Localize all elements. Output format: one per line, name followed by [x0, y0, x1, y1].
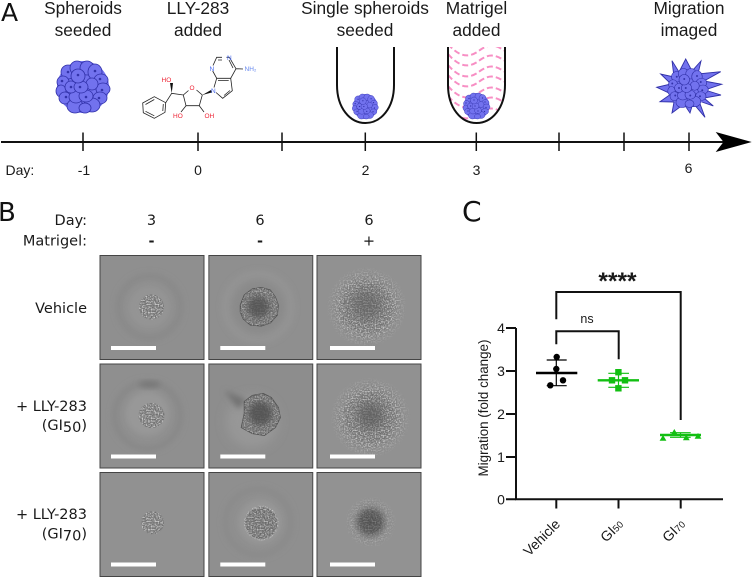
y-axis title: Migration (fold change)	[476, 340, 491, 476]
micrograph: GI50 day 6 matrigel	[316, 364, 422, 468]
micrograph: GI50 day 6	[208, 364, 314, 468]
micrograph: vehicle day 6 matrigel	[316, 255, 422, 360]
timeline day labels	[6, 160, 693, 178]
column headers: +	[363, 234, 375, 250]
timeline day labels: -1	[78, 162, 90, 178]
column headers	[23, 213, 375, 250]
timeline day labels: 3	[473, 162, 481, 178]
row labels: Vehicle	[35, 301, 87, 317]
column headers: Matrigel:	[23, 234, 87, 250]
significance bracket: vehicle vs GI70: ****	[598, 268, 637, 295]
data: vehicle	[536, 354, 577, 388]
row labels: (GI	[42, 418, 63, 434]
panel A: experimental timeline	[1, 0, 752, 178]
significance bracket: vehicle vs GI50	[556, 312, 619, 359]
timeline arrow	[1, 132, 752, 152]
y-axis tick labels: 3	[497, 363, 505, 379]
column headers: Day:	[55, 213, 87, 229]
significance bracket: vehicle vs GI70	[556, 268, 681, 420]
icon: LLY-283 molecule: HO	[162, 77, 171, 84]
timeline day labels: 6	[685, 160, 693, 176]
row labels: 50	[63, 420, 81, 436]
row labels: )	[81, 526, 87, 542]
significance bracket: vehicle vs GI50: ns	[580, 312, 594, 326]
column headers: 3	[147, 213, 156, 229]
y-axis tick labels: 0	[497, 492, 505, 508]
icon: LLY-283 molecule: N	[210, 66, 214, 73]
icon: LLY-283 molecule: N	[211, 88, 216, 95]
icon: migrating spheroid	[657, 59, 722, 117]
icon: LLY-283 molecule: O	[190, 85, 195, 92]
x-axis labels: GI50	[597, 516, 626, 545]
icon: well with matrigel and spheroid	[448, 44, 505, 123]
micrograph: vehicle day 6	[208, 255, 314, 360]
micrograph: GI70 day 3	[100, 472, 204, 577]
micrograph: GI70 day 6 matrigel	[316, 472, 422, 577]
timeline day labels: 2	[362, 162, 370, 178]
micrograph: GI50 day 3	[100, 364, 204, 468]
panel B: spheroid micrographs	[0, 198, 422, 577]
column headers: 6	[255, 213, 265, 229]
icon: LLY-283 molecule: N	[227, 55, 232, 62]
row labels: (GI	[42, 526, 63, 542]
step label: migration imaged: imaged	[661, 20, 717, 40]
y-axis tick labels: 4	[497, 320, 505, 336]
panel C: migration chart	[462, 195, 723, 559]
y-axis tick labels: 2	[497, 406, 505, 422]
icon: LLY-283 molecule	[143, 55, 257, 120]
icon: well with single spheroid	[337, 47, 394, 123]
column headers: 6	[364, 213, 374, 229]
row labels	[16, 301, 87, 544]
micrograph: vehicle day 3	[100, 255, 204, 360]
step label: LLY-283 added: added	[174, 20, 222, 40]
chart axes	[506, 328, 723, 508]
data: GI70	[660, 429, 701, 441]
y-axis tick labels: 1	[497, 449, 505, 465]
step label: spheroids seeded: seeded	[55, 20, 111, 40]
x-axis labels: GI70	[659, 516, 688, 545]
row labels: )	[81, 418, 87, 434]
timeline day labels: 0	[194, 162, 202, 178]
data: GI50	[598, 369, 639, 392]
step label: matrigel added: added	[452, 20, 501, 40]
column headers: -	[257, 234, 263, 250]
y-axis tick labels	[497, 320, 505, 508]
timeline day labels: Day:	[6, 162, 34, 178]
icon: LLY-283 molecule: HO	[173, 113, 183, 120]
row labels: 70	[63, 528, 81, 544]
panel letter C: C	[462, 195, 482, 228]
micrograph: GI70 day 6	[208, 472, 314, 577]
x-axis labels	[520, 516, 688, 559]
icon: LLY-283 molecule: NH₂	[244, 66, 257, 73]
row labels: + LLY-283	[16, 507, 87, 523]
icon: LLY-283 molecule: OH	[204, 113, 215, 120]
x-axis labels: Vehicle	[520, 516, 563, 559]
row labels: + LLY-283	[16, 399, 87, 415]
step label: single spheroids seeded: seeded	[337, 20, 393, 40]
icon: spheroid	[56, 61, 110, 113]
column headers: -	[148, 234, 155, 250]
